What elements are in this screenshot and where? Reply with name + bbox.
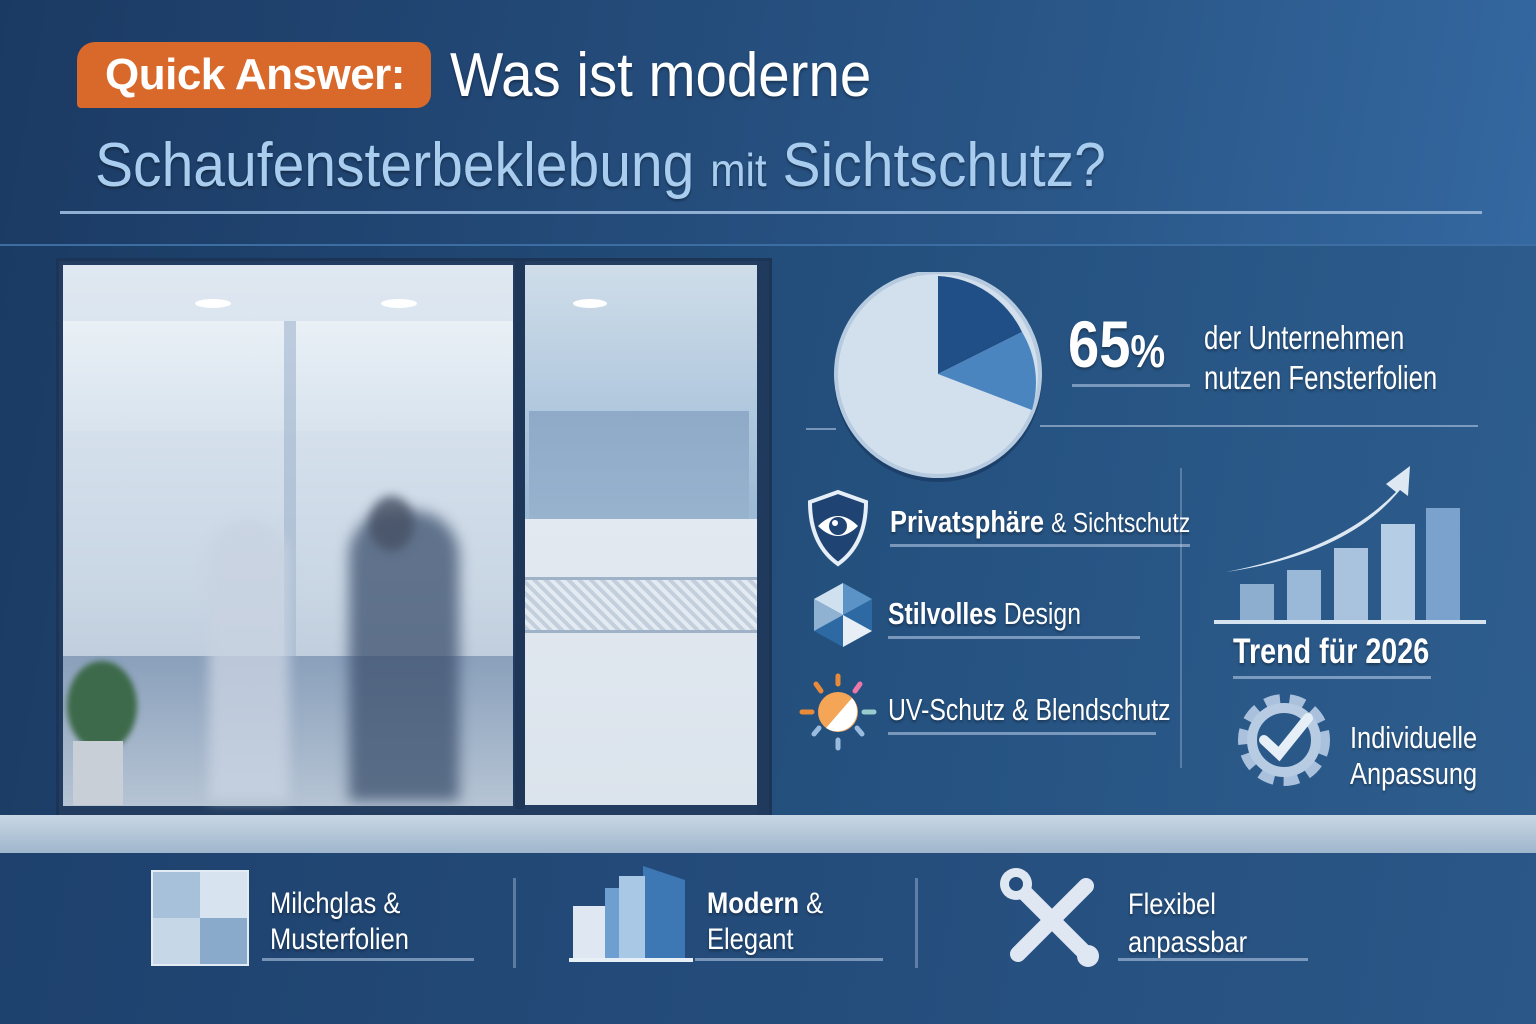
bottom item: Flexibel [1000, 868, 1308, 967]
bottom item: Flexibel: Flexibel [1128, 888, 1216, 921]
badge: Quick Answer [77, 42, 431, 108]
icon: sun [800, 674, 876, 750]
stat: 65% [1068, 307, 1437, 396]
window photo illustration [56, 258, 772, 818]
feature: Privatsphäre [808, 490, 1190, 566]
feature: UV-Schutz [800, 674, 1171, 750]
feature: Individuelle Anpassung: Individuelle [1350, 720, 1477, 755]
title line 2: Schaufensterbeklebung mit Sichtschutz? [95, 131, 1106, 200]
bottom item: Milchglas: Milchglas & [270, 887, 400, 920]
bottom item: Modern: Modern & [707, 887, 823, 920]
header background [0, 0, 1536, 246]
pie chart [834, 272, 1042, 482]
badge: Quick Answer: Quick Answer: [105, 50, 405, 99]
feature: Stilvolles Design: Stilvolles Design [888, 596, 1081, 631]
feature: UV-Schutz: UV-Schutz & Blendschutz [888, 692, 1171, 727]
label: Trend für 2026: Trend für 2026 [1233, 632, 1429, 671]
icon: gear check [1238, 694, 1330, 786]
bottom band [0, 853, 1536, 1024]
bottom item: Modern [569, 866, 883, 962]
icon: tools [1000, 868, 1099, 967]
feature: Individuelle Anpassung: Anpassung [1350, 756, 1477, 791]
bottom item: Milchglas: Musterfolien [270, 923, 409, 956]
feature: Privatsphäre: Privatsphäre & Sichtschutz [890, 504, 1190, 539]
stat: 65%: der Unternehmen [1204, 319, 1404, 356]
stat: 65%: 65% [1068, 307, 1165, 381]
bottom item: Milchglas [151, 870, 474, 966]
bar chart: Trend [1214, 466, 1486, 624]
icon: shield eye [808, 490, 868, 566]
icon: buildings [569, 866, 693, 962]
bottom item: Flexibel: anpassbar [1128, 926, 1247, 959]
stat: 65%: nutzen Fensterfolien [1204, 359, 1437, 396]
icon: glass tiles [151, 870, 249, 966]
icon: hexagon [814, 583, 872, 647]
feature: Stilvolles Design [814, 583, 1140, 647]
bottom item: Modern: Elegant [707, 923, 793, 956]
feature: Individuelle Anpassung [1238, 694, 1477, 794]
floor strip [0, 815, 1536, 853]
title line 1: Was ist moderne [450, 41, 871, 110]
